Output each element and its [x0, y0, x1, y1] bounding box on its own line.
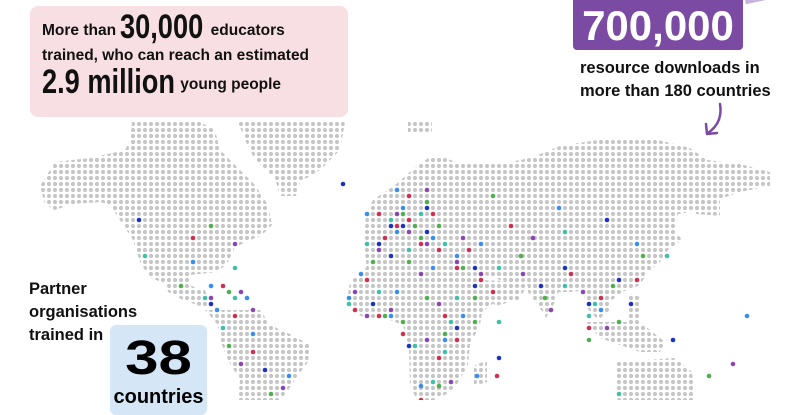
- callout: educators trained: [30, 6, 348, 117]
- arrow: curved pointing to map: [704, 102, 722, 136]
- text: educators stat: [42, 8, 309, 101]
- callout: downloads number: [573, 0, 743, 50]
- text: partner organisations: trained in: [29, 326, 103, 344]
- text: countries: countries: [113, 386, 204, 408]
- big number 38: 38: [125, 332, 192, 385]
- text: educators stat: More than educators: [42, 22, 285, 39]
- text: downloads description: [580, 59, 771, 100]
- callout: 38 countries: [110, 325, 207, 415]
- text: partner organisations: [29, 280, 137, 344]
- decorative tab: [745, 0, 767, 4]
- text: educators stat: 2.9 million: [42, 63, 175, 101]
- text: partner organisations: organisations: [29, 303, 137, 321]
- text: educators stat: 30,000: [120, 8, 204, 46]
- text: downloads description: more than 180 countries: [580, 82, 771, 100]
- text: partner organisations: Partner: [29, 280, 87, 298]
- text: educators stat: young people: [180, 76, 281, 93]
- text: downloads description: resource downloads in: [580, 59, 760, 77]
- big number 700,000: 700,000: [582, 2, 734, 49]
- text: educators stat: trained, who can reach an estimated: [42, 47, 309, 64]
